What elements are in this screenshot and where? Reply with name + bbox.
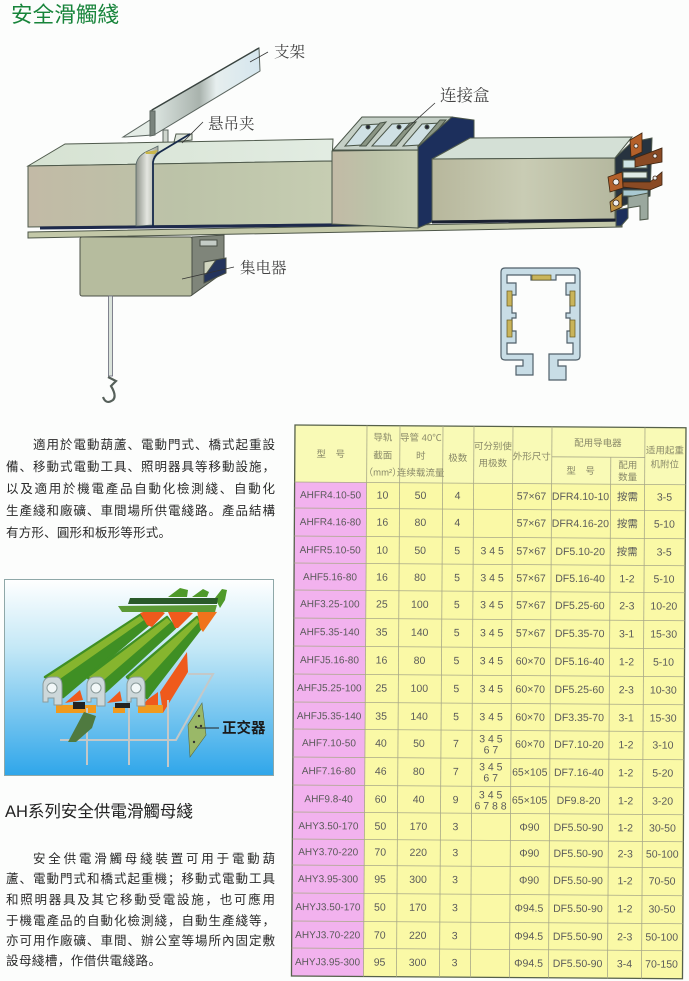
row AHF5.35-140: 3-1 <box>619 628 634 640</box>
orange base <box>56 705 163 713</box>
row AHFR5.10-50: 50 <box>414 545 426 557</box>
row AHY3.70-220: 2-3 <box>618 848 633 860</box>
row AHY3.70-220: 220 <box>409 847 427 859</box>
row AHFJ5.16-80: 5-10 <box>653 657 674 669</box>
row AHF7.10-50: 50 <box>413 738 425 750</box>
row AHY3.50-170: 50 <box>375 821 386 833</box>
row AHYJ3.70-220: 3 <box>452 930 458 942</box>
table header: 适用起重 <box>646 444 684 457</box>
cross bars <box>73 598 218 709</box>
row AHF7.10-50: DF7.10-20 <box>554 739 604 751</box>
row AHFR4.10-50: 3-5 <box>657 492 672 504</box>
orthogonal plate <box>188 703 206 757</box>
row AHYJ3.50-170 <box>295 901 676 916</box>
row AHY3.70-220 <box>298 846 679 861</box>
row AHYJ3.70-220: AHYJ3.70-220 <box>295 930 361 941</box>
row AHF9.8-40: 9 <box>453 794 459 806</box>
row AHYJ3.50-170: 50 <box>374 902 386 914</box>
row AHFR4.16-80: 4 <box>454 517 460 529</box>
row AHFR4.10-50: 4 <box>455 490 461 502</box>
cross-section profile <box>501 268 580 380</box>
row AHF7.16-80: 6 7 <box>483 772 498 784</box>
main rail left <box>28 134 333 227</box>
row AHF5.16-80: 5-10 <box>653 574 675 586</box>
row AHFJ5.16-80: 80 <box>414 655 426 667</box>
collector <box>80 235 226 296</box>
intro paragraph: 有方形、圓形和板形等形式。 <box>6 525 171 540</box>
intro paragraph: 以及適用於機電產品自動化檢測綫、自動化 <box>6 481 275 496</box>
row AHFR4.16-80: 80 <box>414 517 426 529</box>
leader line <box>197 727 219 729</box>
row AHFJ5.25-100: 2-3 <box>619 684 634 696</box>
row AHY3.50-170: 3 <box>452 821 459 833</box>
row AHF7.16-80 <box>302 760 674 786</box>
table header: （mm²） <box>364 466 402 479</box>
table header: 配用 <box>618 460 637 471</box>
table header: 极数 <box>448 452 468 464</box>
busbar paragraph: 于機電產品的自動化檢測綫，自動生產綫等， <box>6 913 275 928</box>
row AHF9.8-40: 1-2 <box>618 795 633 807</box>
row AHF5.16-80: 5 <box>454 572 460 584</box>
row AHF9.8-40: AHF9.8-40 <box>304 794 353 805</box>
row AHFJ5.16-80: 3 4 5 <box>480 655 503 667</box>
table header: 导轨 <box>373 432 393 444</box>
row AHFR5.10-50: 3-5 <box>657 547 672 559</box>
row AHFJ5.25-100: AHFJ5.25-100 <box>297 683 362 694</box>
row AHFR5.10-50: AHFR5.10-50 <box>300 545 361 556</box>
row AHFJ5.35-140: AHFJ5.35-140 <box>297 711 362 722</box>
label: collector: 集电器 <box>240 259 287 277</box>
row AHY3.95-300: 3 <box>452 874 458 886</box>
row AHFR4.16-80: 5-10 <box>654 519 675 531</box>
row AHY3.95-300: DF5.50-90 <box>553 875 603 887</box>
intro paragraph: 適用於電動葫蘆、電動門式、橋式起重設 <box>33 437 275 452</box>
row AHYJ3.50-170: 170 <box>409 902 427 914</box>
section heading: AH系列安全供電滑觸母綫 <box>5 802 193 821</box>
table header: 型 号 <box>317 449 345 460</box>
row AHFR5.10-50: DF5.10-20 <box>555 546 605 558</box>
row AHF5.16-80: 1-2 <box>619 573 635 585</box>
table header: 可分别使 <box>474 440 512 453</box>
specification table <box>291 425 686 979</box>
orange side support <box>138 652 188 713</box>
table header: 时 <box>416 450 426 462</box>
row AHY3.50-170 <box>298 820 676 835</box>
bottom rail lip <box>28 221 622 238</box>
row AHY3.50-170: DF5.50-90 <box>554 822 603 834</box>
label: suspension clamp: 悬吊夹 <box>208 115 255 133</box>
table header: 机附位 <box>650 458 680 471</box>
row AHFJ5.25-100: DF5.25-60 <box>554 684 604 696</box>
row AHYJ3.50-170: AHYJ3.50-170 <box>295 902 361 913</box>
row AHY3.95-300: Φ90 <box>519 875 539 887</box>
row AHF3.25-100: 100 <box>411 599 429 611</box>
row AHFR5.10-50: 5 <box>454 545 460 557</box>
row AHF9.8-40: 65×105 <box>512 795 547 807</box>
row AHFR5.10-50: 10 <box>376 545 388 557</box>
row AHF5.35-140: 140 <box>411 627 429 639</box>
leader lines <box>182 52 435 279</box>
table header: 截面 <box>373 450 392 462</box>
row AHFR4.16-80: AHFR4.16-80 <box>300 517 361 528</box>
busbar paragraph: 亦可用作廠礦、車間、辦公室等場所內固定敷 <box>6 933 275 948</box>
row AHYJ3.95-300: Φ94.5 <box>514 958 543 970</box>
row AHF5.35-140: AHF5.35-140 <box>300 627 360 638</box>
row AHFR4.10-50: AHFR4.10-50 <box>300 490 362 501</box>
diagram: safety trolley line assembly <box>28 48 662 402</box>
title: 安全滑觸綫 <box>11 3 119 27</box>
row AHY3.50-170: Φ90 <box>519 822 540 834</box>
photo panel: green conductor rails <box>4 580 274 776</box>
row AHF7.10-50 <box>302 732 674 758</box>
row AHYJ3.70-220: 2-3 <box>617 931 633 943</box>
table header: 数量 <box>618 471 638 483</box>
table header: 连续载流量 <box>397 467 445 479</box>
row AHF7.16-80: 1-2 <box>618 767 634 779</box>
row AHFR4.10-50: 57×67 <box>517 491 546 503</box>
row AHFR4.16-80: DFR4.16-20 <box>552 518 609 530</box>
busbar paragraph: 設母綫槽，作借供電綫路。 <box>6 953 161 968</box>
row AHY3.70-220: 70 <box>374 847 386 859</box>
row AHFR5.10-50 <box>300 543 672 559</box>
row AHF3.25-100: 5 <box>454 599 460 611</box>
row AHF7.10-50: 1-2 <box>618 739 634 751</box>
hook <box>103 296 116 402</box>
row AHFJ5.16-80 <box>300 654 674 669</box>
row AHF7.10-50: 40 <box>375 738 387 750</box>
row AHYJ3.95-300: 300 <box>409 957 427 969</box>
row AHY3.50-170: 170 <box>410 821 427 833</box>
label: orthogonal device: 正交器 <box>222 719 266 737</box>
table header: 配用导电器 <box>574 437 622 449</box>
row AHF5.16-80: 16 <box>376 572 388 584</box>
row AHYJ3.95-300: DF5.50-90 <box>553 958 603 970</box>
clamp arm <box>68 712 96 742</box>
row AHFR4.10-50: 50 <box>415 490 427 502</box>
row AHF5.35-140 <box>300 626 677 641</box>
row AHF9.8-40: DF9.8-20 <box>557 795 601 807</box>
row AHYJ3.70-220 <box>295 929 678 944</box>
row AHFJ5.25-100: 60×70 <box>516 684 545 696</box>
row AHFJ5.16-80: 60×70 <box>516 656 545 668</box>
row AHYJ3.95-300: 3 <box>452 957 458 969</box>
row AHFJ5.16-80: DF5.16-40 <box>555 656 604 668</box>
row AHFR4.16-80: 57×67 <box>517 518 546 530</box>
row AHFR5.10-50: 57×67 <box>516 546 546 558</box>
row AHFJ5.25-100: 100 <box>411 683 428 695</box>
table header: 导管 40℃ <box>400 432 442 444</box>
row AHFR4.16-80 <box>300 515 675 531</box>
row AHYJ3.70-220: DF5.50-90 <box>553 931 603 943</box>
row AHFJ5.25-100: 10-30 <box>650 684 677 697</box>
row AHY3.50-170: AHY3.50-170 <box>298 821 359 832</box>
row AHFJ5.35-140: 3-1 <box>619 712 634 724</box>
row AHY3.95-300: 300 <box>409 874 427 886</box>
row AHFR4.10-50 <box>300 488 672 504</box>
row AHF7.10-50: AHF7.10-50 <box>302 738 356 749</box>
row AHF3.25-100: 3 4 5 <box>480 599 504 611</box>
row AHF5.35-140: 3 4 5 <box>480 627 504 639</box>
row AHY3.70-220: AHY3.70-220 <box>298 847 359 858</box>
row AHYJ3.70-220: 70 <box>374 930 386 942</box>
row AHYJ3.70-220: Φ94.5 <box>514 931 543 943</box>
row AHF5.35-140: 15-30 <box>650 628 677 641</box>
row AHY3.95-300: AHY3.95-300 <box>298 874 359 885</box>
row AHFJ5.16-80: 5 <box>454 655 460 667</box>
busbar paragraph: 和照明器具及其它移動受電設施，也可應用 <box>6 892 275 907</box>
row AHYJ3.70-220: 50-100 <box>645 931 678 944</box>
row AHFJ5.25-100 <box>297 682 677 697</box>
rails <box>45 615 201 698</box>
row AHF9.8-40 <box>304 788 673 814</box>
row AHY3.50-170: 30-50 <box>649 822 676 835</box>
row AHY3.70-220: Φ90 <box>519 848 539 860</box>
row AHF7.16-80: 80 <box>413 766 425 778</box>
row AHF7.10-50: 7 <box>453 738 459 750</box>
busbar paragraph <box>6 851 275 968</box>
row AHFJ5.25-100: 3 4 5 <box>480 683 503 695</box>
row AHYJ3.50-170: 30-50 <box>648 903 676 916</box>
row AHF3.25-100: AHF3.25-100 <box>300 599 360 610</box>
row AHF5.16-80: DF5.16-40 <box>555 573 605 585</box>
row AHF7.16-80: 46 <box>375 766 387 778</box>
row AHY3.50-170: 1-2 <box>618 822 633 834</box>
row AHF9.8-40: 40 <box>413 794 425 806</box>
row AHY3.70-220: 50-100 <box>646 848 679 861</box>
row AHYJ3.70-220: 220 <box>409 930 427 942</box>
row AHF9.8-40: 6 7 8 8 <box>474 800 507 812</box>
label: connecting box: 连接盒 <box>440 86 490 105</box>
row AHY3.70-220: DF5.50-90 <box>553 848 603 860</box>
row AHFJ5.35-140: DF3.35-70 <box>554 712 604 724</box>
row AHYJ3.95-300: 3-4 <box>617 958 632 970</box>
row AHF7.16-80: DF7.16-40 <box>554 767 604 779</box>
row AHFR4.10-50: 按需 <box>617 490 638 503</box>
row AHF7.16-80: AHF7.16-80 <box>302 766 356 777</box>
orange blocks <box>65 608 217 703</box>
row AHF5.16-80: 57×67 <box>516 573 546 585</box>
table header: 外形尺寸 <box>513 451 551 463</box>
row AHFJ5.35-140: 60×70 <box>515 712 545 724</box>
row AHFJ5.25-100: 25 <box>375 683 387 695</box>
rear rail ends <box>168 588 227 608</box>
row AHF9.8-40: 3 4 5 <box>479 789 503 801</box>
row AHF7.16-80: 5-20 <box>652 768 673 780</box>
intro paragraph: 備、移動式電動工具、照明器具等移動設施， <box>6 459 275 474</box>
connecting box <box>332 117 474 228</box>
row AHF7.10-50: 6 7 <box>484 744 498 756</box>
row AHFR5.10-50: 3 4 5 <box>480 545 504 557</box>
label: bracket: 支架 <box>274 43 306 61</box>
row AHF3.25-100: 25 <box>376 599 388 611</box>
row AHYJ3.95-300: AHYJ3.95-300 <box>295 957 361 968</box>
row AHFJ5.35-140: 5 <box>453 711 459 723</box>
row AHFJ5.16-80: 1-2 <box>619 656 634 668</box>
row AHFR5.10-50: 按需 <box>617 545 638 558</box>
busbar paragraph: 安全供電滑觸母綫裝置可用于電動葫 <box>33 851 275 866</box>
row AHY3.95-300: 70-50 <box>649 875 676 888</box>
row AHYJ3.95-300 <box>295 956 678 971</box>
table header: 型 号 <box>566 466 595 477</box>
rail end caps <box>43 677 145 706</box>
row AHF5.16-80: 3 4 5 <box>480 572 504 584</box>
row AHF9.8-40: 3-20 <box>652 796 673 808</box>
table header <box>316 431 684 484</box>
row AHFR4.16-80: 按需 <box>617 517 638 530</box>
row AHYJ3.50-170: DF5.50-90 <box>553 903 603 915</box>
row AHFJ5.35-140: 140 <box>410 711 428 723</box>
row AHF5.35-140: 57×67 <box>516 628 546 640</box>
row AHFJ5.25-100: 5 <box>453 683 459 695</box>
row AHY3.95-300: 95 <box>374 874 386 886</box>
row AHF3.25-100 <box>300 598 677 613</box>
row AHF5.35-140: 5 <box>454 627 460 639</box>
intro paragraph: 生產綫和廠礦、車間場所供電綫路。產品結構 <box>6 503 275 518</box>
row AHFJ5.35-140: 15-30 <box>650 712 677 725</box>
row AHY3.70-220: 3 <box>452 847 458 859</box>
row AHF5.35-140: DF5.35-70 <box>555 628 605 640</box>
busbar paragraph: 蘆、電動門式和橋式起重機；移動式電動工具 <box>6 871 275 886</box>
row AHYJ3.50-170: Φ94.5 <box>514 903 544 915</box>
suspension clamp <box>136 134 190 226</box>
row AHF5.35-140: 35 <box>376 627 388 639</box>
row AHF7.16-80: 7 <box>453 766 459 778</box>
row AHFR4.10-50: 10 <box>377 490 389 502</box>
row AHFR4.10-50: DFR4.10-10 <box>552 491 609 503</box>
row AHFR4.16-80: 16 <box>376 517 388 529</box>
copper terminals <box>608 133 662 212</box>
wire frame <box>60 674 213 767</box>
table header: 用极数 <box>478 457 508 469</box>
row AHFJ5.16-80: 16 <box>376 655 388 667</box>
row AHFJ5.35-140: 3 4 5 <box>479 711 503 723</box>
row AHF5.16-80: AHF5.16-80 <box>303 572 357 583</box>
row AHFJ5.35-140: 35 <box>375 711 387 723</box>
row AHF3.25-100: DF5.25-60 <box>555 600 605 612</box>
row AHF7.16-80: 3 4 5 <box>479 761 503 773</box>
row AHF5.16-80: 80 <box>414 572 426 584</box>
row AHYJ3.50-170: 1-2 <box>617 903 633 915</box>
row AHF7.10-50: 3-10 <box>652 740 674 752</box>
row AHF7.16-80: 65×105 <box>512 767 548 779</box>
row AHF9.8-40: 60 <box>375 794 387 806</box>
row AHF3.25-100: 57×67 <box>516 600 546 612</box>
row AHYJ3.50-170: 3 <box>452 902 458 914</box>
row AHYJ3.95-300: 95 <box>374 957 386 969</box>
bracket <box>123 48 260 145</box>
row AHF7.10-50: 3 4 5 <box>479 733 503 745</box>
row AHY3.95-300: 1-2 <box>617 875 633 887</box>
row AHF7.10-50: 60×70 <box>515 739 545 751</box>
row AHY3.95-300 <box>298 873 676 888</box>
row AHF3.25-100: 2-3 <box>619 600 635 612</box>
main rail right <box>432 137 652 226</box>
intro paragraph <box>6 437 275 540</box>
row AHFJ5.35-140 <box>297 710 677 725</box>
row AHYJ3.95-300: 70-150 <box>645 958 678 971</box>
row AHF5.16-80 <box>303 571 675 586</box>
row AHF3.25-100: 10-20 <box>650 600 677 613</box>
row AHFJ5.16-80: AHFJ5.16-80 <box>300 655 359 666</box>
